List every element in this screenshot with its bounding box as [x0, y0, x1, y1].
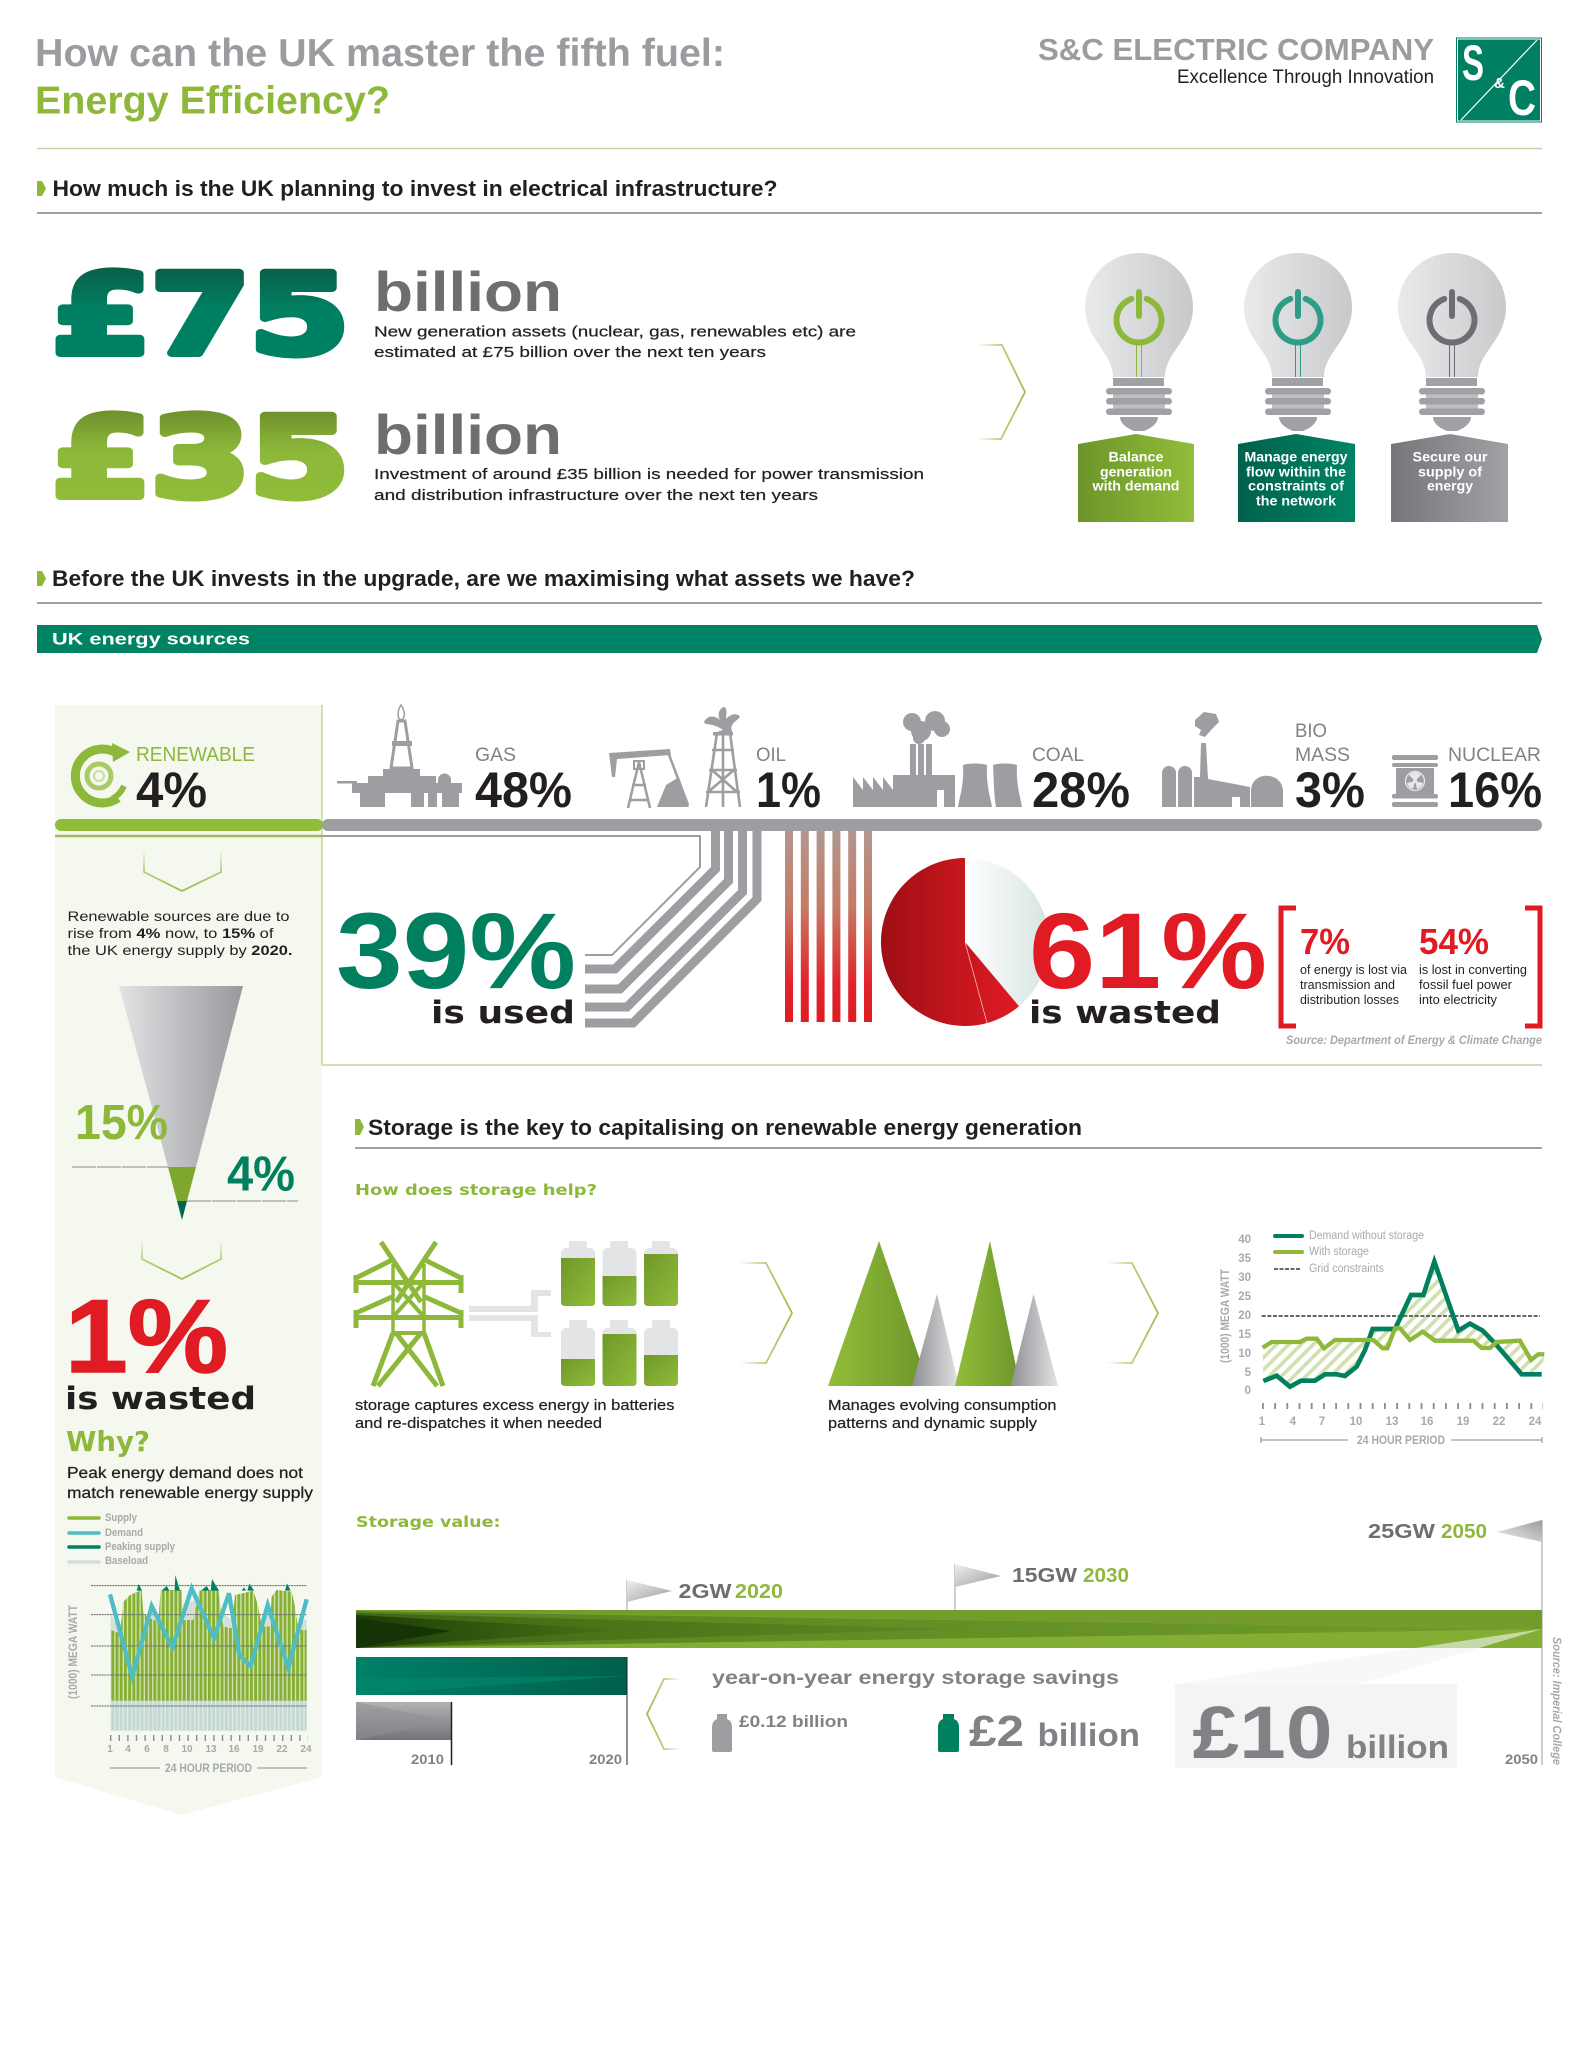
funnel chart: 4% [227, 1148, 295, 1202]
storage caption 2: patterns and dynamic supply [828, 1416, 1038, 1432]
chart labels: right: 22 [1493, 1416, 1505, 1428]
label: renewable 4%: 4% [136, 762, 207, 818]
legend: storage chart: Grid constraints [1309, 1263, 1384, 1275]
saving: £2 billion: billion [1038, 1717, 1140, 1753]
renewable text: the UK energy supply by 2020. [68, 942, 292, 958]
bulb: manage energy flow: Manage energy [1244, 450, 1348, 464]
company name: Excellence Through Innovation [1177, 66, 1434, 88]
company name [1038, 32, 1434, 88]
used energy lines [322, 830, 757, 1023]
why text [66, 1425, 313, 1502]
title [35, 32, 725, 122]
£35 billion block: Investment of around £35 billion is needed for power transmission [374, 466, 924, 483]
arrow: chevron right 1 [739, 1263, 792, 1363]
54% note: into electricity [1419, 992, 1497, 1007]
flag: 25GW 2050: 25GW [1368, 1521, 1435, 1543]
61% is wasted: 61% [1029, 890, 1267, 1011]
icon: coal plant [853, 711, 1022, 807]
label: biomass 3%: 3% [1295, 762, 1365, 818]
bulb: manage energy flow: the network [1256, 494, 1337, 508]
banner: UK energy sources [37, 625, 1542, 653]
legend: supply and demand: Peaking supply [105, 1541, 176, 1553]
chart labels: right [1220, 1234, 1542, 1447]
61% is wasted: is wasted [1029, 995, 1221, 1031]
heading: maximising assets: Before the UK invests in the upgrade, are we maximising what assets we have? [52, 566, 915, 591]
saving: £0.12 billion: £0.12 billion [739, 1712, 848, 1731]
chart labels: right: 19 [1457, 1416, 1469, 1428]
chart labels: right: 10 [1238, 1348, 1251, 1360]
storage caption 1 [355, 1398, 674, 1432]
chart labels: left: 6 [144, 1744, 150, 1755]
why text: Peak energy demand does not [67, 1465, 304, 1482]
year labels: 2010 [411, 1752, 444, 1767]
icon: medium bottle [938, 1714, 959, 1752]
savings heading: year-on-year energy storage savings [712, 1668, 1119, 1689]
bulb: balance generation: generation [1100, 464, 1172, 480]
label: oil 1%: 1% [756, 762, 821, 818]
chart labels: left: 13 [205, 1744, 217, 1755]
chart labels: right: 20 [1238, 1310, 1251, 1322]
chart labels: right: (1000) MEGA WATT [1220, 1269, 1232, 1363]
chart labels: right: 7 [1319, 1416, 1325, 1428]
bulb: secure supply [1391, 253, 1508, 522]
flag: 2GW 2020: 2GW [678, 1581, 732, 1603]
timeline bar [356, 1610, 1542, 1648]
panel: renewable column [55, 705, 322, 1815]
legend: storage chart: With storage [1309, 1246, 1369, 1258]
flag: 25GW 2050: 2050 [1441, 1521, 1487, 1543]
label: biomass 3%: MASS [1295, 745, 1350, 766]
7% note: transmission and [1300, 977, 1395, 992]
legend: supply and demand: Baseload [105, 1555, 148, 1567]
chart labels: right: 30 [1238, 1272, 1251, 1284]
storage caption 1: and re-dispatches it when needed [355, 1416, 602, 1432]
arrow: chevron left [647, 1679, 680, 1749]
subheading: how does storage help: How does storage help? [355, 1181, 597, 1199]
54% note: 54% [1419, 921, 1489, 962]
why text: match renewable energy supply [67, 1485, 313, 1502]
flag: 25GW 2050 [1368, 1520, 1542, 1765]
£75 billion block: £75 [52, 251, 349, 379]
energy bar [322, 819, 1542, 831]
£35 billion block: and distribution infrastructure over the next ten years [374, 487, 818, 504]
chart labels: right: 10 [1350, 1416, 1362, 1428]
why text: Why? [66, 1425, 150, 1458]
chart labels: right: 4 [1290, 1416, 1297, 1428]
heading: investment: How much is the UK planning to invest in electrical infrastructure? [52, 176, 778, 201]
storage caption 2 [828, 1398, 1056, 1432]
logo: S [1462, 35, 1484, 91]
bulb: balance generation: with demand [1091, 478, 1180, 494]
flag: 15GW 2030: 2030 [1083, 1565, 1129, 1587]
bulb: manage energy flow: flow within the [1246, 464, 1347, 480]
label: biomass 3% [1295, 721, 1365, 818]
logo: C [1508, 70, 1536, 126]
flag: 2GW 2020: 2020 [735, 1581, 783, 1603]
arrow: chevron down 2 [142, 1240, 221, 1279]
icon: oil derrick [704, 707, 740, 807]
chart labels: left: 1 [107, 1744, 113, 1755]
icon: pylon [356, 1242, 461, 1386]
source: Imperial College: Source: Imperial College [1550, 1637, 1562, 1766]
label: gas 48%: 48% [475, 762, 572, 818]
£75 billion block: New generation assets (nuclear, gas, renewables etc) are [374, 324, 856, 340]
bar: 2010 savings [356, 1702, 452, 1765]
year labels: 2050 [1505, 1752, 1538, 1767]
label: biomass 3%: BIO [1295, 721, 1327, 742]
heading: storage: Storage is the key to capitalising on renewable energy generation [368, 1115, 1082, 1140]
7% note: 7% [1300, 921, 1350, 962]
bulb: secure supply: Secure our [1412, 450, 1488, 464]
legend: supply and demand [69, 1512, 176, 1567]
£35 billion block [52, 394, 924, 522]
legend: supply and demand: Supply [105, 1512, 138, 1524]
flag: 15GW 2030: 15GW [1012, 1565, 1077, 1587]
1% is wasted: is wasted [65, 1381, 256, 1417]
renewable bar [55, 819, 323, 831]
chart labels: left: 19 [252, 1744, 264, 1755]
£35 billion block: £35 [52, 394, 349, 522]
legend: storage chart: Demand without storage [1309, 1230, 1424, 1242]
subheading: storage value: Storage value: [356, 1513, 500, 1531]
bulb: manage energy flow [1238, 253, 1355, 522]
arrow: chevron down 1 [144, 850, 221, 891]
chart labels: left: 16 [228, 1744, 240, 1755]
logo [1456, 35, 1542, 126]
icon: small bottle [712, 1714, 732, 1752]
bulb: balance generation [1078, 253, 1194, 522]
chart labels: left: 10 [181, 1744, 193, 1755]
icon: renewable cycle [75, 743, 130, 803]
icon: nuclear barrel [1392, 755, 1438, 807]
7% note [1300, 921, 1408, 1007]
bulb: secure supply: supply of [1418, 464, 1483, 480]
1% is wasted [65, 1279, 256, 1417]
label: nuclear 16%: NUCLEAR [1448, 745, 1541, 766]
7% note: of energy is lost via [1300, 962, 1408, 977]
pie chart [881, 858, 1049, 1026]
chart labels: right: 1 [1259, 1416, 1266, 1428]
bar: 2020 savings [356, 1657, 627, 1765]
7% note: distribution losses [1300, 992, 1399, 1007]
flag: 2GW 2020 [627, 1580, 783, 1610]
legend: supply and demand: Demand [105, 1527, 143, 1539]
bracket: right [1525, 908, 1540, 1026]
chart labels: left: 24 HOUR PERIOD [165, 1763, 252, 1775]
arrow: chevron right 2 [1107, 1263, 1158, 1363]
chart labels: right: 35 [1238, 1253, 1252, 1265]
batteries [561, 1241, 678, 1386]
legend: storage chart [1274, 1230, 1424, 1275]
icon: pumpjack [609, 749, 689, 808]
label: renewable 4% [136, 744, 255, 818]
chart labels: right: 25 [1238, 1291, 1252, 1303]
label: renewable 4%: RENEWABLE [136, 744, 255, 766]
bulb: manage energy flow: constraints of [1248, 478, 1345, 494]
funnel chart: 15% [75, 1096, 168, 1150]
saving: £10 billion panel: billion [1346, 1729, 1449, 1765]
bracket: left [1281, 908, 1296, 1026]
chart labels: right: 40 [1238, 1234, 1251, 1246]
renewable text [68, 908, 292, 958]
storage caption 1: storage captures excess energy in batteries [355, 1398, 674, 1414]
label: oil 1%: OIL [756, 745, 786, 766]
saving: £2 billion: £2 [969, 1707, 1024, 1756]
£75 billion block [52, 251, 856, 379]
£35 billion block: billion [374, 403, 562, 466]
chart labels: left: 8 [163, 1744, 169, 1755]
chart: supply vs demand [91, 1575, 308, 1738]
title: How can the UK master the fifth fuel: [35, 32, 725, 75]
funnel chart [72, 986, 298, 1220]
bulb: balance generation: Balance [1108, 450, 1164, 464]
54% note: fossil fuel power [1419, 977, 1513, 992]
wasted energy lines [785, 831, 872, 1022]
label: gas 48%: GAS [475, 745, 516, 766]
saving: £2 billion [969, 1707, 1140, 1756]
£75 billion block: billion [374, 260, 562, 323]
chart labels: left [68, 1605, 312, 1775]
chart labels: left: (1000) MEGA WATT [68, 1605, 80, 1699]
chart labels: right: 15 [1238, 1329, 1252, 1341]
chart labels: right: 16 [1421, 1416, 1433, 1428]
icon: gas rig [337, 705, 462, 807]
triangles [828, 1241, 1058, 1386]
chart labels: right: 0 [1245, 1385, 1251, 1397]
chart labels: left: 24 [300, 1744, 312, 1755]
chart labels: right: 13 [1386, 1416, 1398, 1428]
arrow: chevron to bulbs [977, 345, 1025, 439]
£75 billion block: estimated at £75 billion over the next ten years [374, 344, 766, 361]
title: Energy Efficiency? [35, 80, 390, 122]
company name: S&C ELECTRIC COMPANY [1038, 32, 1434, 67]
renewable text: Renewable sources are due to [68, 908, 290, 924]
flag: 15GW 2030 [955, 1564, 1129, 1610]
source: DECC: Source: Department of Energy & Climate Change [1286, 1035, 1543, 1047]
banner: UK energy sources: UK energy sources [52, 630, 250, 648]
label: coal 28%: 28% [1032, 762, 1130, 818]
storage caption 2: Manages evolving consumption [828, 1398, 1056, 1414]
1% is wasted: 1% [65, 1279, 228, 1395]
chart labels: right: 24 HOUR PERIOD [1357, 1435, 1445, 1447]
39% is used: 39% [336, 890, 576, 1011]
year labels: 2020 [589, 1752, 622, 1767]
chart labels: right: 5 [1245, 1367, 1252, 1379]
connector [469, 1290, 551, 1337]
chart labels: left: 4 [125, 1744, 131, 1755]
label: coal 28%: COAL [1032, 745, 1084, 766]
bulb: secure supply: energy [1427, 478, 1473, 494]
saving: £10 billion panel [1175, 1629, 1542, 1774]
label: nuclear 16%: 16% [1448, 762, 1542, 818]
line chart: demand with storage [1262, 1262, 1544, 1406]
year labels [411, 1752, 1538, 1767]
54% note [1419, 921, 1527, 1007]
renewable text: rise from 4% now, to 15% of [68, 925, 274, 941]
39% is used: is used [431, 995, 575, 1031]
chart labels: right: 24 [1529, 1416, 1542, 1428]
icon: biomass plant [1162, 712, 1283, 807]
chart labels: left: 22 [276, 1744, 288, 1755]
saving: £10 billion panel: £10 [1192, 1691, 1332, 1774]
logo: & [1494, 75, 1505, 92]
54% note: is lost in converting [1419, 962, 1527, 977]
